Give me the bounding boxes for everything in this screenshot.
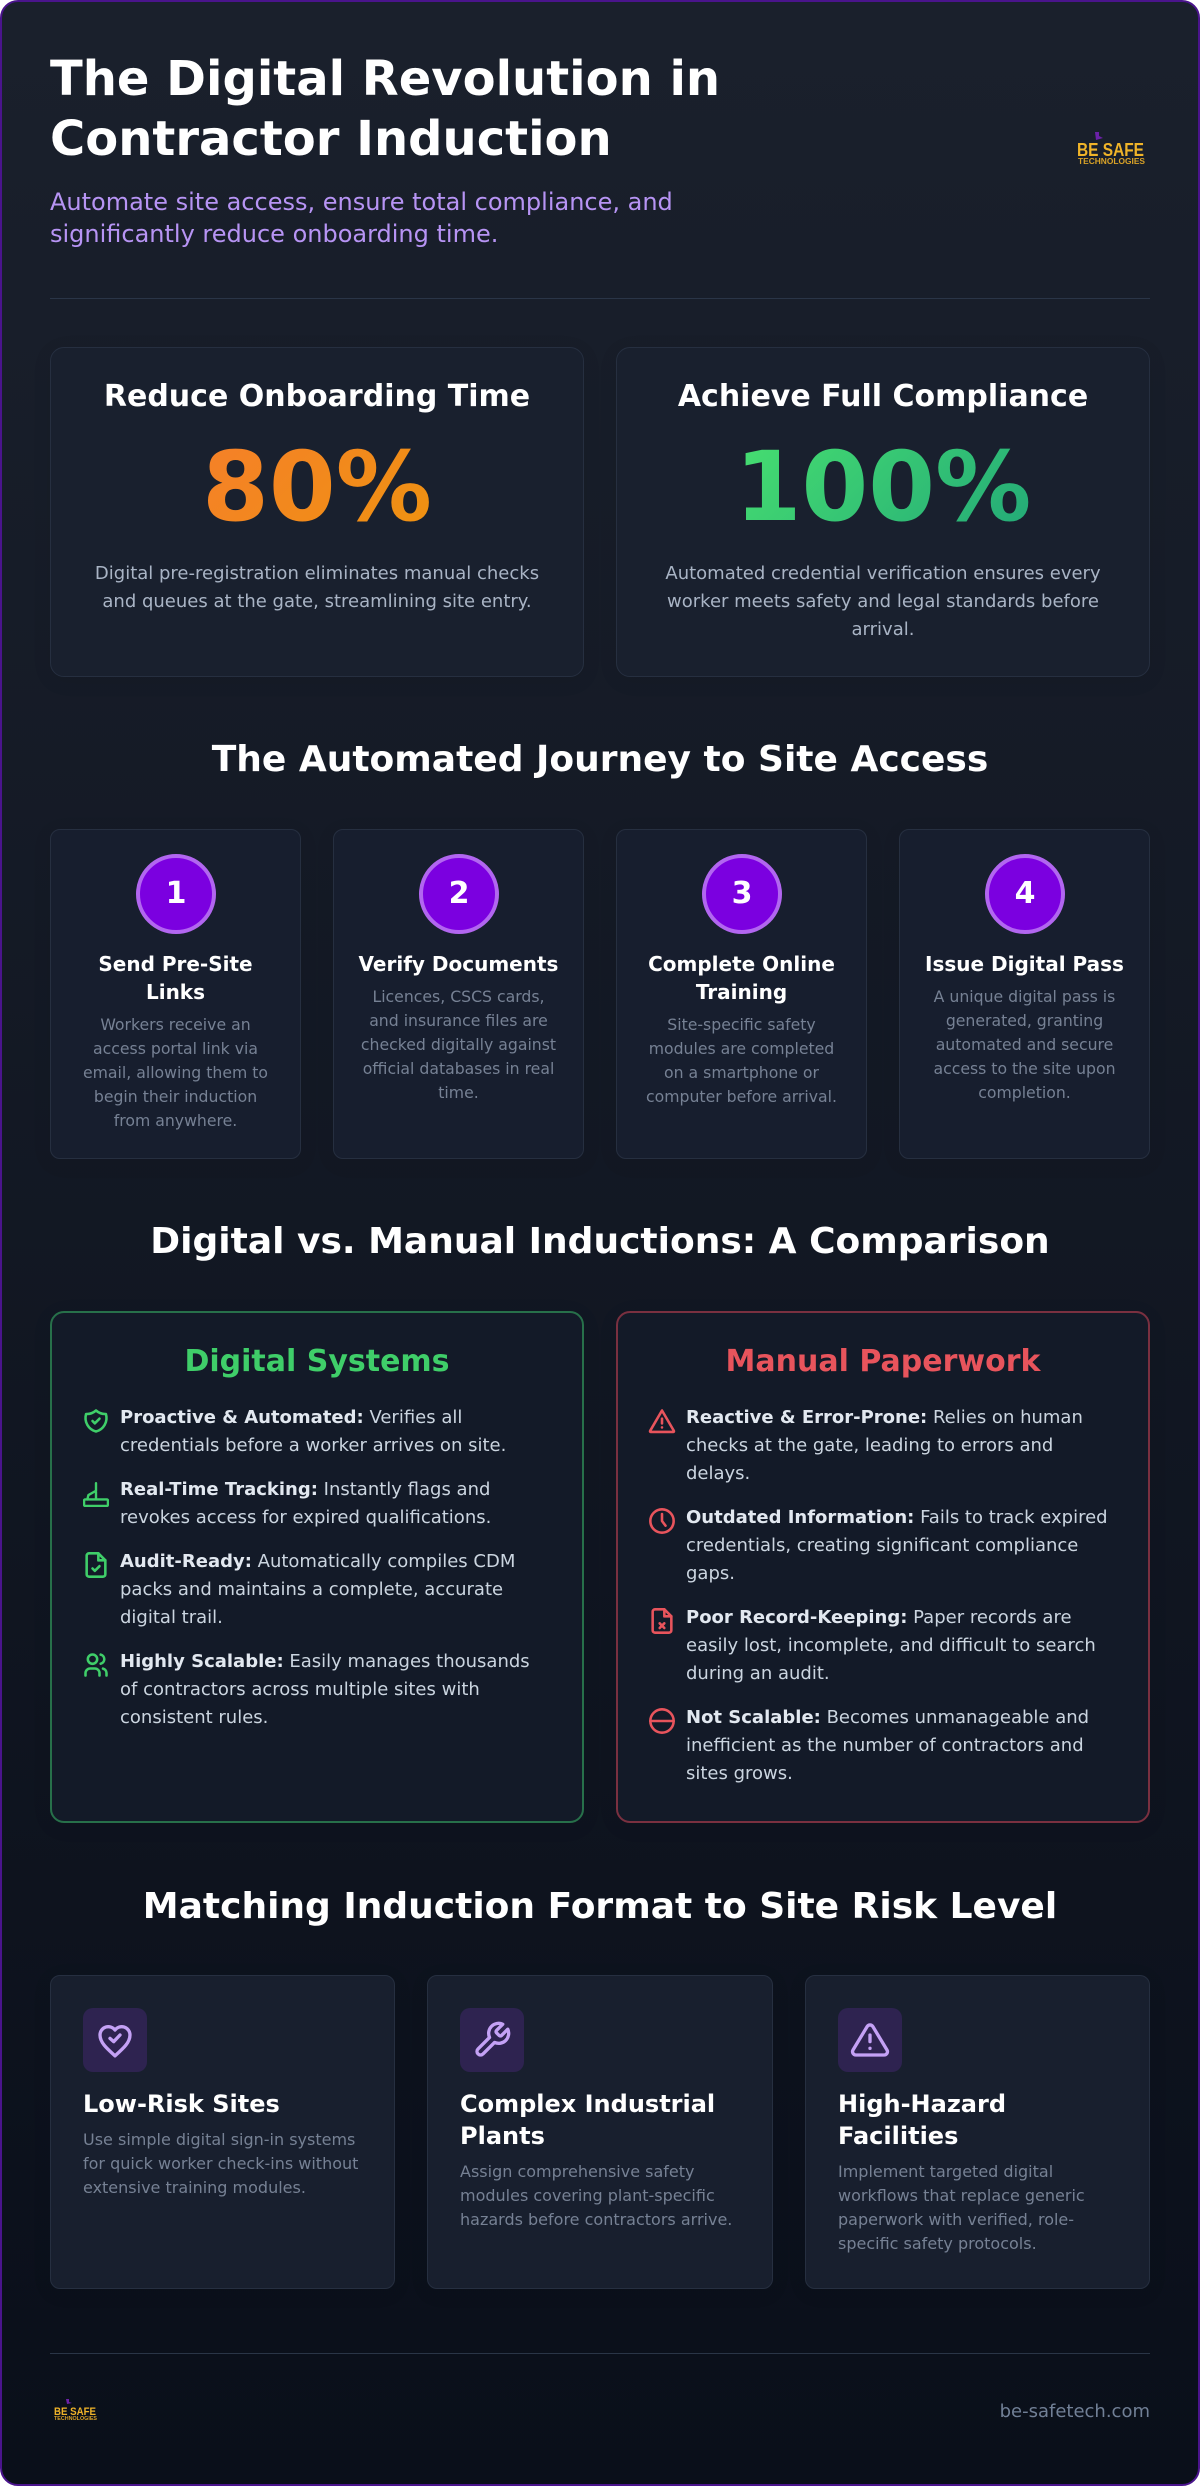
step title: Issue Digital Pass <box>925 952 1124 976</box>
item: reactive: delays. <box>686 1463 750 1484</box>
description: Digital pre-registration eliminates manual checks <box>95 563 539 584</box>
header: subtitle: Automate site access, ensure total compliance, and <box>50 188 673 216</box>
item: not scalable: Not Scalable: Becomes unmanageable and <box>686 1707 1089 1728</box>
step description <box>83 1015 268 1130</box>
step description: computer before arrival. <box>646 1087 837 1106</box>
step description <box>933 987 1116 1102</box>
icon: file check <box>85 1552 107 1578</box>
card description: Use simple digital sign-in systems <box>83 2130 355 2149</box>
step description: Licences, CSCS cards, <box>372 987 545 1006</box>
step description: from anywhere. <box>114 1111 237 1130</box>
icon: circle minus <box>649 1708 675 1734</box>
step title <box>98 952 253 1004</box>
item: record keeping: Poor Record-Keeping: Paper records are <box>686 1607 1072 1628</box>
card title: Low-Risk Sites <box>83 2090 280 2118</box>
header: subtitle: significantly reduce onboarding time. <box>50 220 498 248</box>
card description: for quick worker check-ins without <box>83 2154 358 2173</box>
item: not scalable: inefficient as the number of contractors and <box>686 1735 1084 1756</box>
step description <box>646 1015 837 1106</box>
icon: heart check <box>83 2008 147 2072</box>
logo: Be Safe Technologies header: TECHNOLOGIES <box>1078 157 1146 166</box>
card title <box>838 2090 1006 2150</box>
icon: clock <box>649 1508 675 1534</box>
step description: begin their induction <box>94 1087 257 1106</box>
panel: reduce onboarding time <box>50 347 584 677</box>
card title: Plants <box>460 2122 545 2150</box>
footer logo: TECHNOLOGIES <box>54 2416 98 2422</box>
item: not scalable <box>686 1707 1089 1784</box>
step description: official databases in real <box>363 1059 554 1078</box>
heading: Achieve Full Compliance <box>678 379 1088 414</box>
step description: completion. <box>978 1083 1071 1102</box>
step description: checked digitally against <box>361 1035 556 1054</box>
step description: on a smartphone or <box>664 1063 819 1082</box>
footer url: be-safetech.com <box>1000 2401 1150 2422</box>
card title: Complex Industrial <box>460 2090 715 2118</box>
step title <box>648 952 835 1004</box>
icon: tracking <box>83 1482 109 1507</box>
item: reactive: checks at the gate, leading to errors and <box>686 1435 1053 1456</box>
step description: access portal link via <box>93 1039 258 1058</box>
number badge: 2 <box>449 876 469 911</box>
step 4 <box>899 829 1150 1159</box>
step description: email, allowing them to <box>83 1063 268 1082</box>
panel: high-hazard facilities <box>805 1975 1150 2289</box>
item: outdated: Outdated Information: Fails to track expired <box>686 1507 1108 1528</box>
description: Automated credential verification ensures every <box>665 563 1101 584</box>
step description: generated, granting <box>946 1011 1103 1030</box>
card description: hazards before contractors arrive. <box>460 2210 732 2229</box>
item: record keeping: easily lost, incomplete, and difficult to search <box>686 1635 1096 1656</box>
panel: manual paperwork <box>616 1311 1150 1823</box>
description: arrival. <box>852 619 914 640</box>
card description <box>83 2130 358 2197</box>
icon: shield check <box>84 1409 108 1433</box>
number badge <box>985 854 1065 934</box>
description <box>95 563 539 612</box>
number badge: 1 <box>166 876 186 911</box>
item: proactive: Proactive & Automated: Verifies all <box>120 1407 462 1428</box>
card title <box>460 2090 715 2150</box>
item: scalable: of contractors across multiple sites with <box>120 1679 480 1700</box>
step description: Workers receive an <box>100 1015 251 1034</box>
footer logo: BE SAFE <box>54 2406 96 2418</box>
step title: Send Pre-Site <box>98 952 253 976</box>
item: proactive: credentials before a worker arrives on site. <box>120 1435 506 1456</box>
header: subtitle <box>50 188 673 248</box>
item: tracking: Real-Time Tracking: Instantly flags and <box>120 1479 490 1500</box>
number badge <box>702 854 782 934</box>
heading: risk level: Matching Induction Format to Site Risk Level <box>143 1886 1057 1927</box>
item: audit <box>120 1551 515 1628</box>
description: and queues at the gate, streamlining site entry. <box>102 591 532 612</box>
item: audit: digital trail. <box>120 1607 223 1628</box>
item: scalable: Highly Scalable: Easily manages thousands <box>120 1651 530 1672</box>
step description: Site-specific safety <box>667 1015 816 1034</box>
item: outdated: gaps. <box>686 1563 735 1584</box>
card title: Facilities <box>838 2122 958 2150</box>
item: audit: Audit-Ready: Automatically compiles CDM <box>120 1551 515 1572</box>
panel heading: Digital Systems <box>184 1344 450 1379</box>
step title: Links <box>146 980 205 1004</box>
item: record keeping: during an audit. <box>686 1663 830 1684</box>
card description: Assign comprehensive safety <box>460 2162 695 2181</box>
step title: Verify Documents <box>359 952 558 976</box>
card description: extensive training modules. <box>83 2178 306 2197</box>
item: scalable <box>120 1651 530 1728</box>
card title: High-Hazard <box>838 2090 1006 2118</box>
card description: modules covering plant-specific <box>460 2186 715 2205</box>
item: reactive: Reactive & Error-Prone: Relies on human <box>686 1407 1083 1428</box>
card description: workflows that replace generic <box>838 2186 1085 2205</box>
panel: low-risk sites <box>50 1975 395 2289</box>
step description <box>361 987 556 1102</box>
card description: Implement targeted digital <box>838 2162 1053 2181</box>
step description: time. <box>438 1083 479 1102</box>
heading: comparison: Digital vs. Manual Inductions: A Comparison <box>150 1221 1050 1262</box>
item: outdated: credentials, creating significant compliance <box>686 1535 1078 1556</box>
step title: Complete Online <box>648 952 835 976</box>
item: tracking <box>120 1479 491 1528</box>
number badge <box>419 854 499 934</box>
step description: A unique digital pass is <box>934 987 1115 1006</box>
step 3 <box>616 829 867 1159</box>
number badge: 3 <box>732 876 752 911</box>
item: not scalable: sites grows. <box>686 1763 793 1784</box>
item: scalable: consistent rules. <box>120 1707 268 1728</box>
header: title: The Digital Revolution in <box>50 51 720 107</box>
logo: Be Safe Technologies header <box>1077 132 1146 166</box>
item: reactive <box>686 1407 1083 1484</box>
step 2 <box>333 829 584 1159</box>
step 1 <box>50 829 301 1159</box>
icon: users <box>84 1653 108 1677</box>
footer logo <box>54 2399 98 2422</box>
item: audit: packs and maintains a complete, accurate <box>120 1579 503 1600</box>
heading: journey: The Automated Journey to Site Access <box>212 739 988 780</box>
stat: 100%: 100% <box>735 431 1031 543</box>
icon: warning <box>838 2008 902 2072</box>
description <box>665 563 1101 640</box>
heading: Reduce Onboarding Time <box>104 379 530 414</box>
item: outdated <box>686 1507 1108 1584</box>
header: title: Contractor Induction <box>50 111 612 167</box>
card description <box>460 2162 732 2229</box>
icon: warning triangle <box>648 1409 676 1434</box>
item: record keeping <box>686 1607 1096 1684</box>
header: title <box>50 51 720 167</box>
panel: achieve full compliance <box>616 347 1150 677</box>
stat: 80%: 80% <box>202 431 432 543</box>
card description: specific safety protocols. <box>838 2234 1037 2253</box>
number badge <box>136 854 216 934</box>
icon: wrench <box>460 2008 524 2072</box>
number badge: 4 <box>1015 876 1035 911</box>
panel: complex industrial plants <box>427 1975 773 2289</box>
panel heading: Manual Paperwork <box>726 1344 1040 1379</box>
step description: and insurance files are <box>369 1011 548 1030</box>
step title: Training <box>696 980 787 1004</box>
step description: modules are completed <box>649 1039 834 1058</box>
description: worker meets safety and legal standards before <box>667 591 1099 612</box>
step description: automated and secure <box>936 1035 1113 1054</box>
item: tracking: revokes access for expired qualifications. <box>120 1507 491 1528</box>
panel: digital systems <box>50 1311 584 1823</box>
card description <box>838 2162 1085 2253</box>
step description: access to the site upon <box>933 1059 1116 1078</box>
icon: file x <box>651 1608 673 1634</box>
card description: paperwork with verified, role- <box>838 2210 1074 2229</box>
item: proactive <box>120 1407 506 1456</box>
